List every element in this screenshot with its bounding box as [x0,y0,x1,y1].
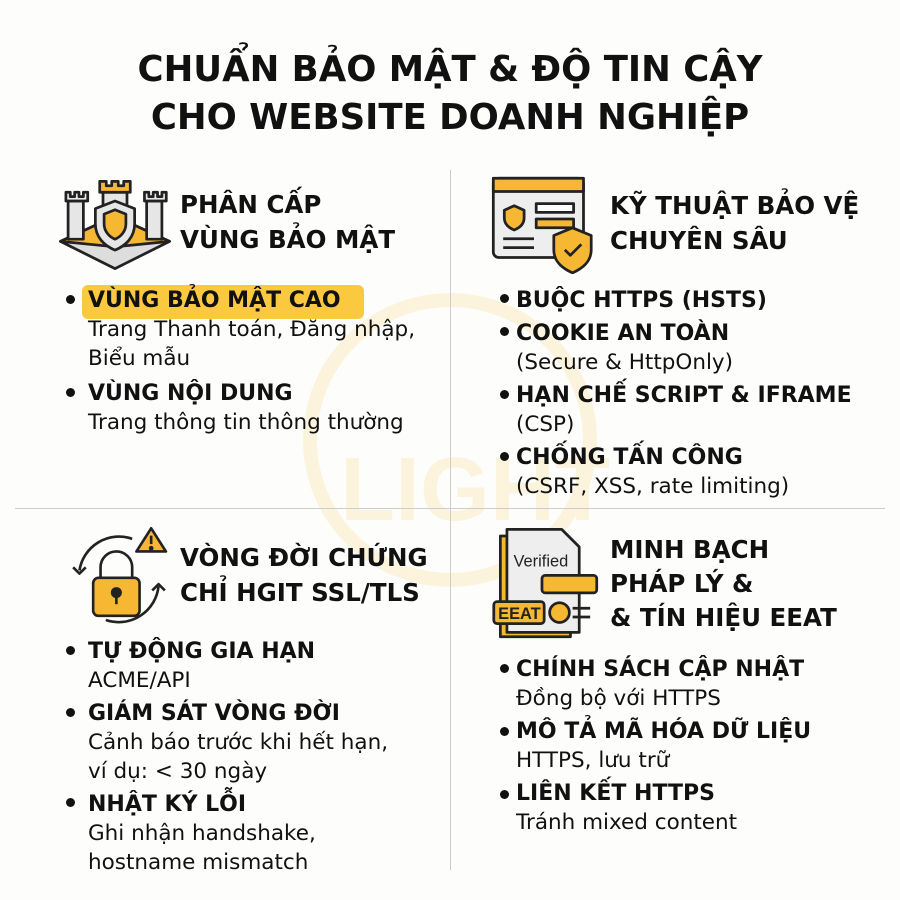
title [138,42,763,138]
bullets: VÙNG BẢO MẬT CAO [88,288,341,313]
bullets: Ghi nhận handshake, [88,821,316,846]
bullets: (Secure & HttpOnly) [516,350,733,375]
bullets [88,284,415,435]
bullets: HTTPS, lưu trữ [516,748,669,773]
heading [180,186,395,254]
panel: deep protection [492,176,859,499]
heading [610,535,837,632]
watermark: LIGHT [340,440,610,540]
title: CHO WEBSITE DOANH NGHIỆP [151,97,749,138]
bullets: hostname mismatch [88,850,308,875]
bullets: HẠN CHẾ SCRIPT & IFRAME [516,383,852,408]
bullets: BUỘC HTTPS (HSTS) [516,288,767,313]
bullets: (CSRF, XSS, rate limiting) [516,474,789,499]
bullets: GIÁM SÁT VÒNG ĐỜI [88,701,340,726]
heading: KỸ THUẬT BẢO VỆ [610,191,859,220]
bullets: MÔ TẢ MÃ HÓA DỮ LIỆU [516,719,811,744]
heading: & TÍN HIỆU EEAT [610,603,837,632]
bullets [88,637,388,875]
heading: VÙNG BẢO MẬT [180,225,395,254]
heading: PHÂN CẤP [180,190,321,219]
bullets: CHÍNH SÁCH CẬP NHẬT [516,657,804,682]
bullets: VÙNG NỘI DUNG [88,381,293,406]
bullets: ACME/API [88,668,191,693]
heading: PHÁP LÝ & [610,569,753,598]
bullets: Đồng bộ với HTTPS [516,686,721,711]
bullets: Tránh mixed content [516,810,737,835]
icon: verified document: Verified [514,553,568,571]
bullets: (CSP) [516,412,574,437]
panel: legal transparency [492,528,837,835]
heading [180,542,428,607]
panel: certificate lifecycle [66,526,428,875]
bullets: Cảnh báo trước khi hết hạn, [88,730,388,755]
bullets [516,286,852,499]
bullets: NHẬT KÝ LỖI [88,792,246,817]
bullets [516,655,811,835]
icon: verified document [492,528,598,638]
icon: castle [59,180,171,270]
panel: security zones [59,180,415,435]
bullets: COOKIE AN TOÀN [516,321,729,346]
bullets: ví dụ: < 30 ngày [88,759,267,784]
bullets: Trang Thanh toán, Đăng nhập, [88,317,415,342]
heading: CHỈ HGIT SSL/TLS [180,578,420,607]
watermark [303,293,610,587]
icon: lock cycle [72,526,168,624]
title: CHUẨN BẢO MẬT & ĐỘ TIN CẬY [138,49,762,90]
bullets: CHỐNG TẤN CÔNG [516,445,743,470]
heading: VÒNG ĐỜI CHỨNG [180,543,428,572]
icon: browser shield [492,176,593,274]
heading [610,188,859,255]
icon: verified document: EEAT [498,605,541,623]
bullets: Trang thông tin thông thường [88,410,404,435]
bullets: TỰ ĐỘNG GIA HẠN [88,639,315,664]
heading: MINH BẠCH [610,535,769,564]
bullets: Biểu mẫu [88,346,190,371]
heading: CHUYÊN SÂU [610,226,788,255]
bullets: LIÊN KẾT HTTPS [516,781,715,806]
highlight [82,285,364,319]
